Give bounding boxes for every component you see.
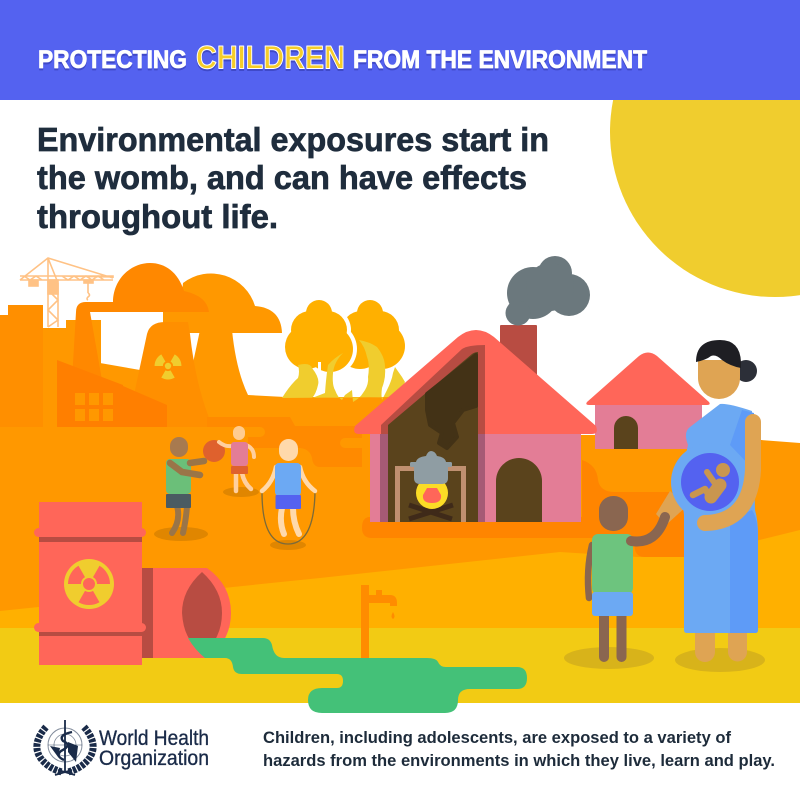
footer text [263, 729, 775, 770]
ground: amber slope [0, 530, 800, 640]
legs [604, 612, 622, 657]
lower rib [34, 623, 146, 632]
shorts [166, 494, 191, 508]
house walls [370, 432, 581, 522]
WHO wordmark [99, 727, 209, 770]
dress shade lower [730, 510, 758, 633]
second cooling tower [163, 273, 402, 432]
shadow [223, 487, 259, 497]
icon: construction crane [20, 258, 113, 327]
small house door [614, 416, 638, 449]
hair bun [735, 360, 757, 382]
head [599, 496, 628, 531]
house door [496, 458, 542, 522]
handle [376, 590, 382, 595]
forearm to child [656, 491, 688, 525]
tree right [337, 300, 405, 369]
WHO emblem [37, 720, 93, 775]
legs [695, 625, 747, 662]
barrel body [39, 502, 142, 665]
terrace lighter pill [340, 438, 380, 448]
WHO wordmark: Organization [99, 747, 209, 770]
factory windows [75, 393, 113, 421]
dress shade upper [730, 410, 754, 470]
flames [282, 340, 405, 402]
water tap [361, 585, 397, 658]
city skyline [0, 263, 402, 432]
small house walls [595, 404, 702, 449]
first cooling tower [132, 322, 212, 430]
indoor smoke [427, 355, 476, 448]
lower rib shadow [39, 630, 142, 636]
ground: mid orange [0, 427, 600, 640]
arms [262, 467, 315, 491]
icon: baby [693, 463, 730, 500]
torso [275, 463, 301, 496]
fire logs [409, 505, 453, 519]
legs [236, 473, 251, 491]
shorts [231, 466, 248, 474]
head [698, 360, 740, 399]
pipe collar [142, 568, 153, 658]
left arm [588, 545, 592, 598]
cooking frame [398, 468, 464, 522]
burning trees [282, 300, 405, 402]
cutaway frame on wall [380, 434, 485, 522]
footer text: Children, including adolescents, are exposed to a variety of [263, 729, 731, 747]
shorts [592, 592, 633, 616]
main heading: the womb, and can have effects [37, 159, 527, 196]
womb [681, 453, 739, 511]
child skipping rope [262, 439, 315, 550]
building: tall left [0, 305, 43, 430]
icon: radiation on tower [155, 354, 181, 379]
footer text: hazards from the environments in which they live, learn and play. [263, 752, 775, 770]
chimney [500, 325, 537, 385]
ridge behind factory [100, 363, 140, 430]
house interior [388, 352, 478, 522]
drop [392, 612, 394, 619]
shorts [276, 495, 301, 509]
dress [680, 404, 758, 633]
footer: WHO logo [37, 720, 209, 775]
upper rib [34, 528, 146, 537]
upper rib shadow [39, 535, 142, 542]
hair [696, 340, 741, 368]
belly [671, 443, 749, 521]
smoke cloud [506, 256, 590, 326]
deep orange terraces left [207, 417, 362, 467]
small house [586, 352, 710, 449]
cooking pot [410, 451, 452, 484]
pipe opening [182, 572, 222, 640]
pole [361, 585, 369, 658]
WHO wordmark: World Health [99, 727, 209, 750]
factory chimney [72, 263, 209, 380]
rope [262, 492, 315, 544]
child raised arm [631, 517, 665, 542]
main heading: Environmental exposures start in [37, 121, 549, 158]
toxic barrel [34, 502, 146, 665]
shadow [270, 540, 306, 550]
shadow [675, 648, 765, 672]
house roof [354, 330, 597, 434]
title: CHILDREN [196, 40, 345, 76]
small house roof [586, 352, 710, 405]
shadow [154, 527, 208, 541]
arm round belly [705, 422, 753, 523]
child catching [219, 426, 259, 497]
building: lighter back [43, 320, 101, 430]
torso [231, 442, 248, 466]
title: FROM THE ENVIRONMENT [353, 46, 647, 74]
cutaway frame on roof [381, 345, 485, 434]
child with ball [154, 437, 225, 541]
legs [172, 506, 187, 533]
main house [354, 330, 597, 522]
ground: yellow foreground [0, 628, 800, 703]
title: PROTECTING [38, 46, 187, 74]
tree left [285, 300, 353, 372]
main heading: throughout life. [37, 198, 278, 235]
arms [170, 461, 204, 475]
toxic waste pipe [142, 568, 231, 658]
head [170, 437, 188, 457]
pipe body [153, 568, 231, 658]
ball [203, 440, 225, 462]
ground: far right hill [575, 438, 800, 640]
torso [166, 459, 191, 494]
icon: sun [610, 0, 800, 297]
deep orange terrace under houses [362, 460, 692, 557]
icon: radiation symbol [64, 559, 114, 609]
white gap around left tree [303, 307, 357, 376]
arms [219, 442, 254, 457]
head [279, 439, 298, 461]
title [38, 40, 647, 76]
legs [281, 508, 299, 534]
shadow [564, 647, 654, 669]
factory building [57, 360, 167, 430]
toxic slime [188, 638, 527, 713]
child holding hand [564, 496, 654, 669]
header banner [0, 0, 800, 100]
torso [592, 534, 633, 594]
main heading [37, 121, 549, 235]
terrace lighter strip [0, 427, 265, 437]
spout [369, 595, 397, 606]
steam cloud two [163, 273, 282, 333]
head [233, 426, 245, 440]
fire [416, 477, 448, 509]
mother [656, 340, 765, 672]
trunk [318, 362, 321, 396]
